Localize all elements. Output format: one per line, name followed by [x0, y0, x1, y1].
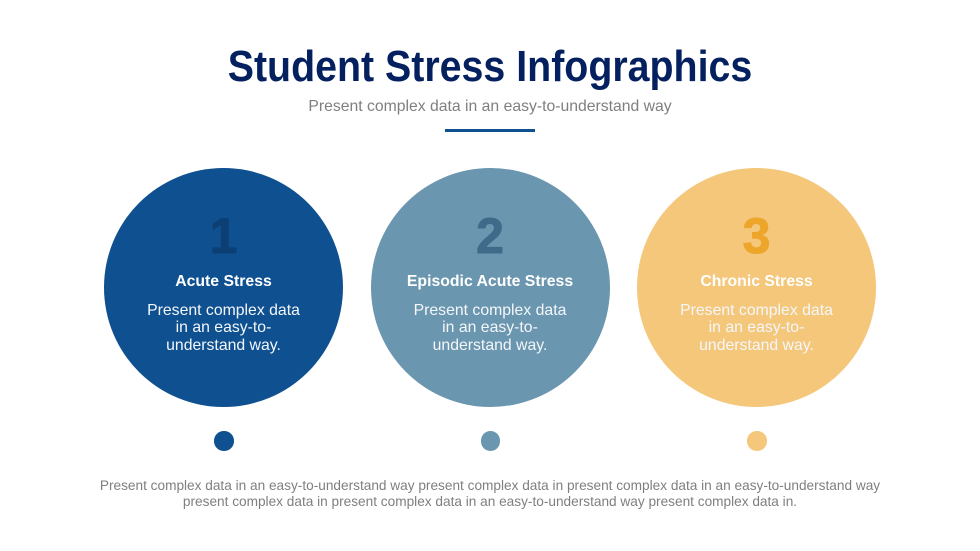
text: chronic stress: Present complex data — [680, 302, 833, 319]
title: Student Stress Infographics — [228, 42, 752, 91]
subtitle: Present complex data in an easy-to-understand way — [308, 98, 672, 115]
number 1: 1 — [210, 208, 237, 264]
footer text — [100, 478, 880, 509]
title underline — [445, 129, 535, 132]
circle: chronic stress — [637, 168, 876, 407]
panel: chronic stress — [637, 168, 876, 451]
circle: acute stress — [104, 168, 343, 407]
text: acute stress: understand way. — [166, 337, 281, 354]
text: episodic acute stress: in an easy-to- — [442, 319, 538, 336]
number 2: 2 — [476, 208, 504, 264]
footer text: present complex data in present complex data in an easy-to-understand way present complex data in. — [183, 494, 797, 509]
text: episodic acute stress: understand way. — [433, 337, 547, 354]
text: chronic stress: in an easy-to- — [709, 319, 804, 336]
text: chronic stress — [680, 302, 833, 354]
panel: episodic acute stress — [371, 168, 610, 451]
dot: episodic acute stress — [480, 431, 500, 450]
number 3: 3 — [743, 208, 770, 264]
heading: acute stress: Acute Stress — [175, 273, 272, 290]
text: acute stress: in an easy-to- — [176, 319, 271, 336]
heading: episodic acute stress: Episodic Acute Stress — [407, 273, 573, 290]
text: episodic acute stress — [414, 302, 566, 354]
dot: acute stress — [214, 431, 234, 450]
text: episodic acute stress: Present complex data — [414, 302, 566, 319]
dot: chronic stress — [747, 431, 766, 450]
text: acute stress: Present complex data — [147, 302, 300, 319]
text: chronic stress: understand way. — [699, 337, 814, 354]
heading: chronic stress: Chronic Stress — [700, 273, 813, 290]
circle: episodic acute stress — [370, 168, 610, 407]
footer text: Present complex data in an easy-to-understand way present complex data in present complex data in an easy-to-understand way — [100, 478, 880, 493]
panel: acute stress — [104, 168, 343, 451]
text: acute stress — [147, 302, 300, 354]
